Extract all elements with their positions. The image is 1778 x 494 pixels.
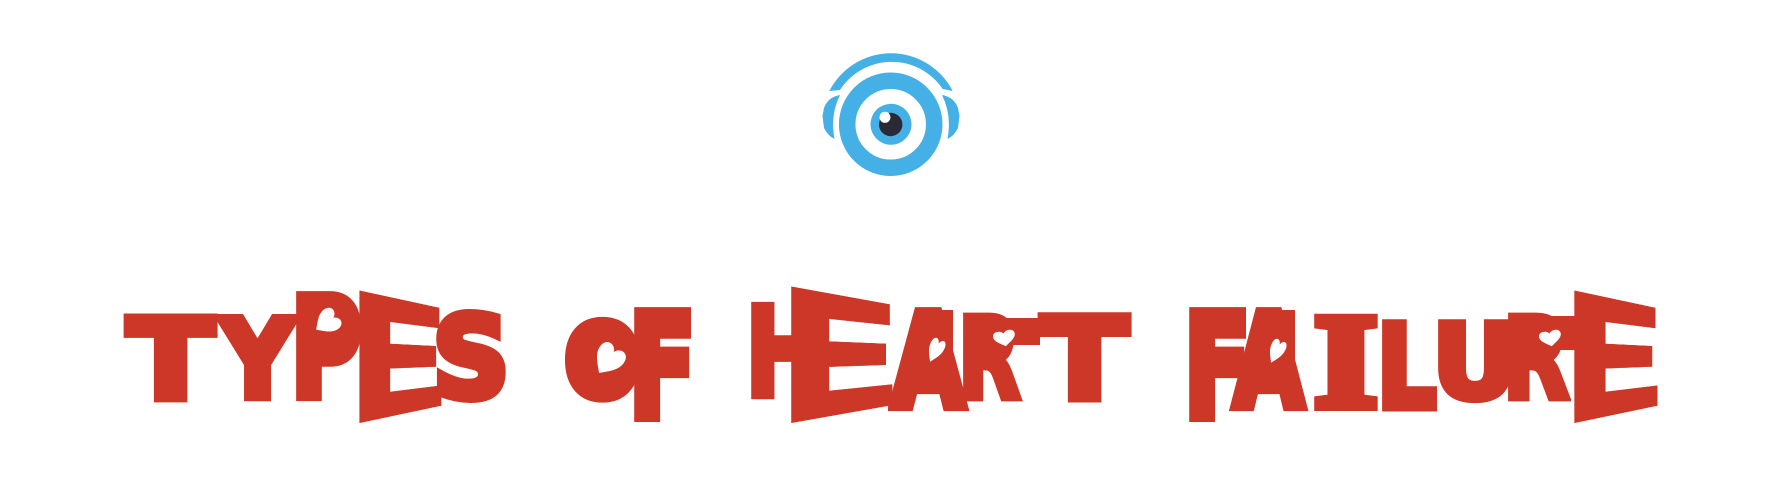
- title: O: [563, 300, 642, 423]
- title: T: [128, 296, 213, 424]
- title: R: [958, 293, 1021, 425]
- title: H: [747, 283, 819, 423]
- title: R: [1503, 293, 1569, 425]
- title: F: [1184, 284, 1250, 450]
- title: S: [433, 292, 509, 424]
- title: E: [350, 253, 443, 462]
- title: I: [1315, 288, 1377, 435]
- title: A: [1234, 286, 1304, 437]
- title: P: [291, 269, 361, 428]
- icon: eye with headphones logo: [822, 53, 960, 176]
- title: Y: [221, 297, 294, 423]
- title: L: [1377, 301, 1436, 434]
- title: F: [629, 284, 695, 450]
- title: E: [1565, 253, 1659, 462]
- title: E: [780, 247, 895, 464]
- title: A: [892, 286, 965, 437]
- title: T: [1042, 294, 1127, 425]
- title: U: [1433, 303, 1517, 422]
